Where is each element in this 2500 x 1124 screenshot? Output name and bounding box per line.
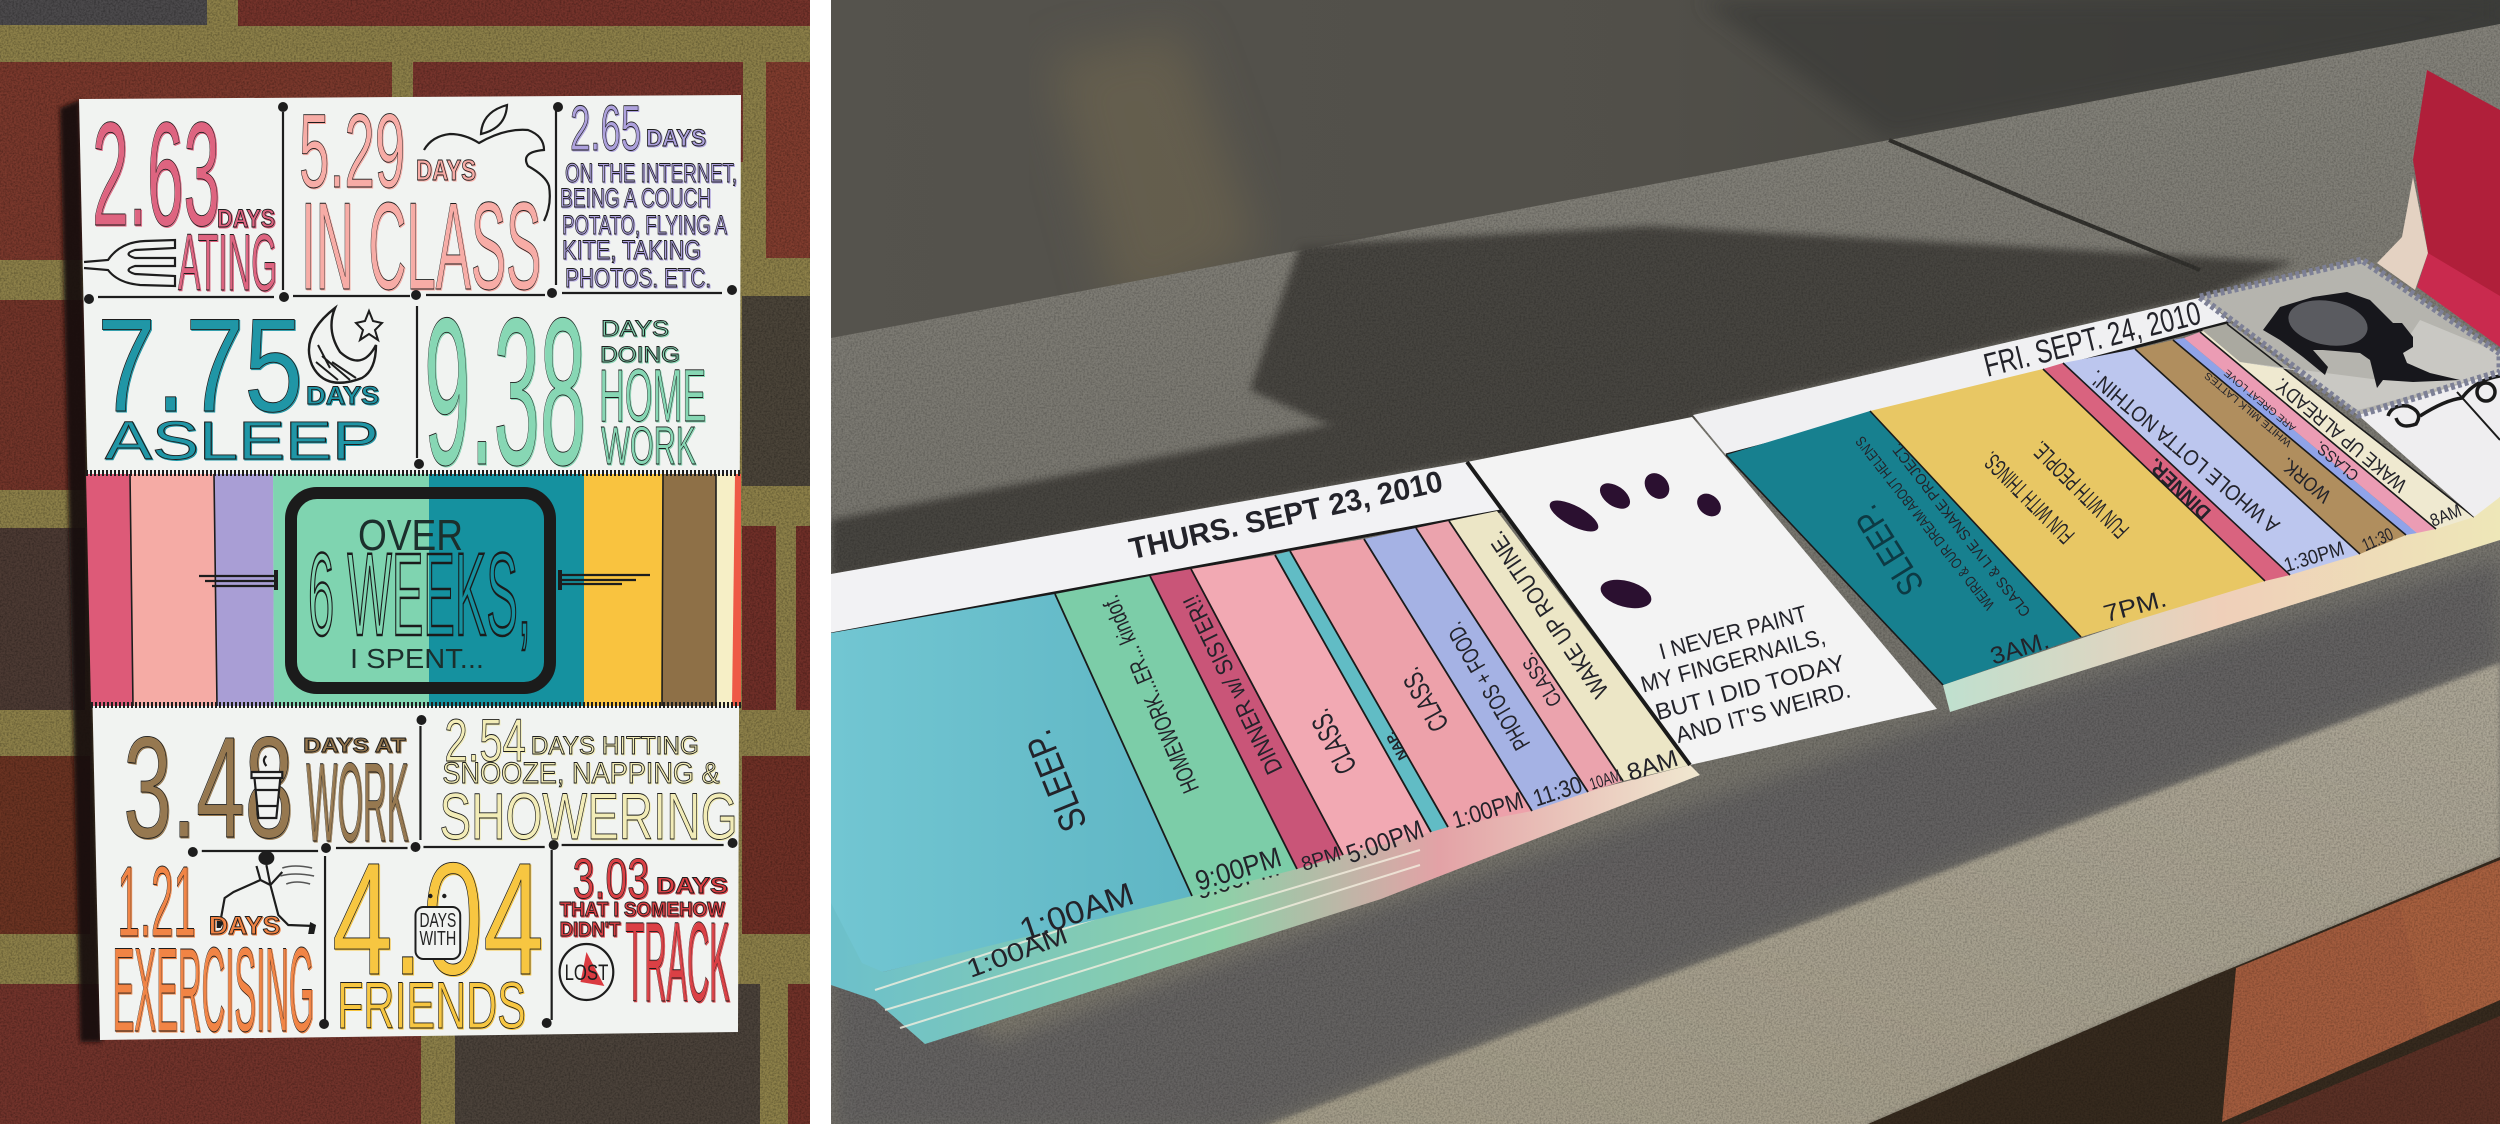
poster: over 6 weeks, I spent: IN CLASS [301, 178, 541, 316]
activity labels: WEIRD & OUR DREAM ABOUT HELEN'S [1853, 433, 1998, 613]
cell: 5.29 days in class: DAYS [416, 155, 476, 187]
note text: AND IT'S WEIRD. [1673, 676, 1853, 748]
red end card [2377, 70, 2500, 347]
activity labels: CLASS. [2312, 437, 2362, 484]
photo: concrete ledge with book [831, 0, 2500, 1124]
icon: moon and star [309, 308, 382, 383]
activity labels: DINNER w/ SISTER!! [1178, 590, 1288, 778]
note text: MY FINGERNAILS, [1638, 623, 1828, 697]
activity labels: WAKE UP ROUTINE. [1483, 526, 1614, 703]
icon: lost sign [560, 944, 613, 1000]
icon: apple outline [424, 105, 550, 221]
icon: profile silhouette [2263, 292, 2460, 388]
cell: 2.63 days eating: DAYS [217, 205, 275, 233]
activity labels: WHITE MILK LATTES [2202, 369, 2294, 448]
cell: 2.65 days on the internet: DAYS [646, 125, 706, 152]
icon: smiley speech box: DAYS [419, 910, 456, 932]
cell: 9.38 days doing homework: DAYS [601, 316, 669, 341]
cell: 2.54 days showering: SHOWERING [439, 779, 738, 853]
poster: over 6 weeks, I spent: EXERCISING [112, 924, 314, 1057]
activity labels: HOMEWORK...ER... kindof. [1097, 591, 1205, 797]
cell: 2.63 days eating [84, 92, 277, 308]
time labels: 11:30 [1530, 771, 1586, 812]
cell: 9.38 days doing homework: DOING [600, 342, 680, 367]
cell: 2.54 days showering: SNOOZE, NAPPING & [442, 757, 720, 790]
time labels: 5:00PM [1342, 814, 1428, 869]
cell: 3.03 days lost track: DAYS [656, 873, 728, 898]
note text: I NEVER PAINT [1656, 600, 1810, 664]
text: TRACK [625, 899, 730, 1025]
time labels: 3AM. [1987, 627, 2052, 671]
cell: 2.65 days on the internet: ON THE INTERNET, [565, 158, 737, 188]
time labels: 8PM [1299, 843, 1344, 876]
activity labels: CLASS. [1516, 648, 1567, 711]
cell: 9.38 days doing homework: 9.38 [424, 274, 586, 509]
cell: 9.38 days doing homework [424, 274, 706, 509]
time labels: 1:00PM [1449, 787, 1527, 834]
icon: lost sign: LOST [565, 960, 608, 985]
cell: 5.29 days in class [299, 93, 550, 316]
cell: 7.75 days asleep: ASLEEP [105, 411, 379, 471]
date heading: FRI. SEPT. 24, 2010 [1980, 294, 2204, 384]
time labels: 8AM [1624, 745, 1682, 787]
activity labels [1018, 526, 1614, 837]
page stack under Thursday [831, 765, 1700, 1044]
activity labels: PHOTOS + FOOD. [1441, 617, 1536, 754]
poster: over 6 weeks, I spent: HOME [599, 354, 706, 437]
white page with ornament [2358, 372, 2500, 517]
cell: 2.54 days showering: 2.54 [444, 707, 526, 774]
icon: coffee cup [251, 756, 282, 818]
activity labels [1845, 365, 2411, 620]
icon: running stick figure [217, 851, 316, 934]
tv frame with title: I SPENT... [350, 643, 484, 674]
poster: over 6 weeks, I spent [79, 92, 741, 1057]
speed lines [199, 570, 650, 590]
cell: 3.03 days lost track: THAT I SOMEHOW [560, 899, 725, 921]
activity labels: FUN WITH PEOPLE. [2027, 436, 2134, 543]
cell: 4.04 days with friends [332, 830, 544, 1042]
cell: 1.21 days exercising [112, 847, 316, 1057]
cell: 3.03 days lost track: 3.03 [573, 848, 649, 911]
page stack under Thursday: 9:00PM [1193, 854, 1282, 905]
cell: 9.38 days doing homework: WORK [601, 416, 696, 476]
date heading: THURS. SEPT 23, 2010 [1126, 465, 1446, 566]
bricks under ledge [1868, 857, 2500, 1124]
photo: brick wall behind poster [0, 0, 810, 1124]
activity labels: DINNER. [2144, 453, 2216, 523]
note text: BUT I DID TODAY [1652, 649, 1847, 725]
cell: 2.65 days on the internet: KITE, TAKING [562, 235, 701, 265]
cell: 3.03 days lost track [560, 848, 730, 1025]
note text [1638, 600, 1853, 748]
page: fingernail note [1467, 417, 1937, 765]
cell: 2.65 days on the internet [560, 92, 737, 293]
activity labels: CLASS & LIVE SNAKE PROJECT. [1889, 440, 2034, 620]
time labels: 11:30 [2359, 524, 2396, 555]
poster: over 6 weeks, I spent: WORK [306, 740, 409, 865]
colour band: proportion stripes [86, 473, 741, 706]
cell: 2.65 days on the internet: POTATO, FLYING A [562, 210, 727, 240]
cell: 7.75 days asleep: 7.75 [97, 292, 303, 440]
time labels [1987, 500, 2464, 671]
poster: over 6 weeks, I spent: ATING [178, 218, 277, 308]
activity labels: ARE GREAT LOVE [2222, 367, 2298, 433]
activity labels: WAKE UP ALREADY. [2271, 373, 2411, 496]
cell: 3.48 days at work: 3.48 [123, 708, 293, 868]
icon: fork [84, 240, 175, 286]
cell: 1.21 days exercising: 1.21 [117, 847, 196, 958]
activity labels: SLEEP. [1845, 498, 1932, 603]
silhouette portrait page [2200, 260, 2500, 415]
cell: 2.54 days showering [439, 707, 738, 853]
icon: smiley speech box [415, 894, 460, 959]
icon: smiley speech box: WITH [419, 928, 456, 950]
shadow on ledge [831, 226, 2295, 578]
activity labels: NAP. [1382, 729, 1410, 763]
activity labels: WORK. [2277, 453, 2335, 507]
cell: 7.75 days asleep: DAYS [306, 382, 379, 410]
cell: 2.65 days on the internet: BEING A COUCH [560, 183, 711, 213]
cell: 2.65 days on the internet: 2.65 [570, 92, 641, 164]
colour band: proportion stripes: 6 WEEKS, [308, 529, 531, 661]
activity labels: CLASS. [1395, 662, 1455, 737]
icon: painted fingernails [1550, 473, 1721, 608]
cell: 2.63 days eating: 2.63 [92, 92, 220, 257]
time labels [1015, 745, 1682, 948]
cell: 4.04 days with friends: FRIENDS [337, 968, 526, 1042]
activity labels: A WHOLE LOTTA NOTHIN'. [2084, 365, 2284, 538]
cell: 3.48 days at work: DAYS AT [303, 735, 406, 757]
cell: 4.04 days with friends: 4.04 [332, 830, 544, 1008]
page: Thursday Sept 23 2010 [831, 462, 1690, 972]
time labels: 8AM [2427, 500, 2464, 531]
time labels: 7PM. [2101, 585, 2169, 628]
shaded concrete below book [831, 560, 2500, 1124]
time labels: 1:30PM [2281, 538, 2347, 577]
activity labels: CLASS. [1303, 704, 1364, 779]
cell: 5.29 days in class: 5.29 [299, 93, 405, 210]
cell: 2.65 days on the internet: PHOTOS. ETC. [565, 263, 711, 293]
cell: 1.21 days exercising: DAYS [209, 912, 280, 940]
page stack edge under Friday [1943, 497, 2500, 712]
activity labels: SLEEP. [1018, 724, 1096, 837]
tv frame with title: OVER [358, 511, 463, 560]
time labels: 9:00PM [1192, 841, 1285, 897]
time labels: 1:00AM [1015, 875, 1138, 948]
activity labels: FUN WITH THINGS. [1977, 446, 2080, 549]
time labels: 10AM [1587, 766, 1623, 794]
cell: 2.54 days showering: DAYS HITTING [531, 732, 699, 760]
cell: 3.03 days lost track: DIDN'T [560, 919, 620, 941]
page stack under Thursday: 1:00AM [962, 919, 1071, 984]
page: Friday Sept 24 2010 [1693, 294, 2474, 685]
tv frame with title [291, 493, 550, 688]
